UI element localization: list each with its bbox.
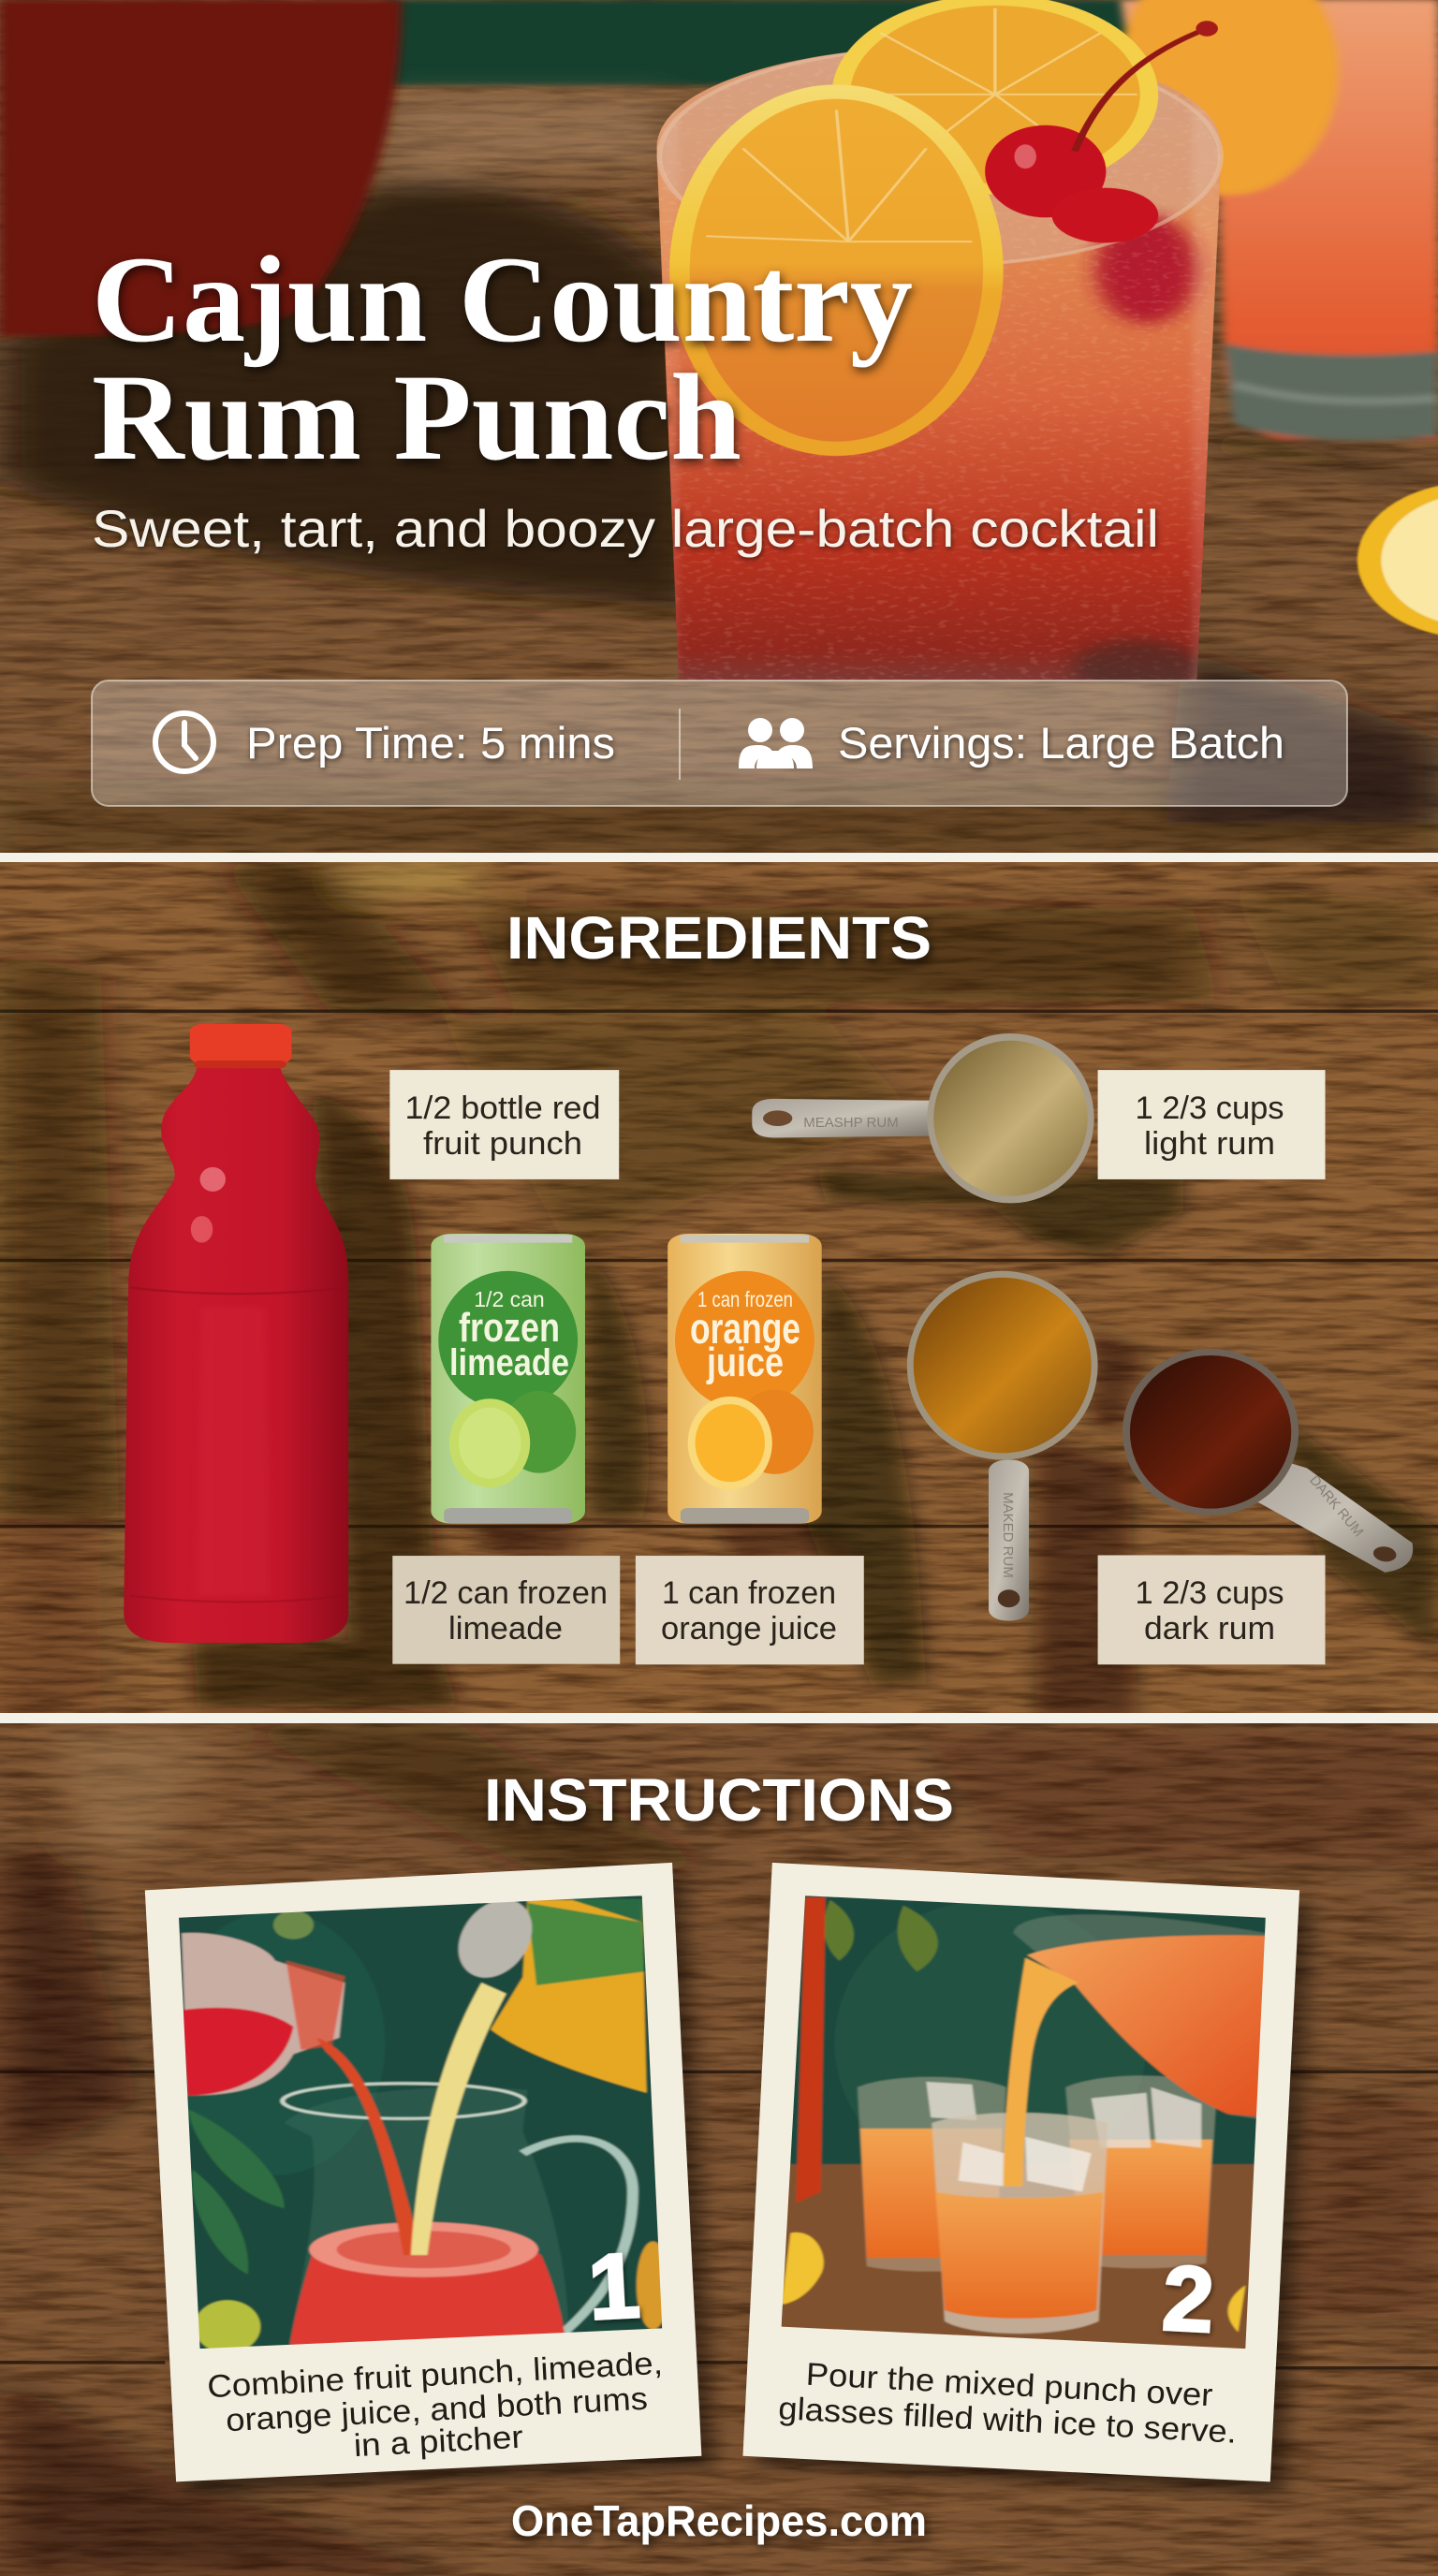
can label text: limeade: limeade [449,1342,569,1383]
red bottle [182,1933,345,2096]
step 1 number and caption [200,2232,667,2471]
label: dark rum [1098,1555,1326,1664]
ingredient captions [404,1090,1284,1647]
ingredient captions: light rum [1144,1126,1275,1162]
title: Rum Punch [92,348,741,486]
ingredient captions: dark rum [1144,1611,1275,1647]
title: Cajun Country [92,230,913,368]
cup handle engravings: DARK RUM [1306,1472,1367,1540]
ingredient captions: 1 2/3 cups [1135,1575,1284,1611]
label: fruit punch [389,1070,619,1179]
can label text: limeade: frozen [459,1305,560,1351]
background foliage [385,0,1137,85]
plank gaps [0,2071,1438,2368]
back lemon slice [831,0,1158,195]
ingredient captions: 1 can frozen [662,1575,836,1611]
can label text: orange juice [690,1287,800,1385]
footer website: OneTapRecipes.com [511,2496,927,2545]
heading: instructions: INSTRUCTIONS [484,1766,954,1834]
pour streams [316,2038,422,2255]
step 1 number and caption: orange juice, and both rums [225,2381,649,2438]
subtitle: Sweet, tart, and boozy large-batch cocktail [92,499,1159,558]
jug and stream [1013,1914,1266,2120]
lemon on table [1357,482,1438,638]
ingredient captions: 1 2/3 cups [1135,1090,1284,1126]
can label text: limeade: 1/2 can [474,1287,545,1311]
ingredient captions: 1/2 bottle red [404,1090,601,1126]
plank gaps [0,1011,1438,1527]
step 2 number and caption: 2 [1160,2247,1216,2351]
heading: ingredients: INGREDIENTS [506,904,932,972]
section: instructions [0,1723,1438,2576]
polaroid shadows [156,1875,1312,2495]
cherries [985,21,1218,242]
ingredient captions: limeade [448,1611,563,1647]
can label text: orange juice: orange [690,1304,800,1353]
lemon wedges [782,2232,824,2305]
label: orange juice [636,1556,864,1664]
light and shadow [0,863,1438,1722]
cup handle engravings: MAKED RUM [1000,1492,1016,1578]
can label text: orange juice: 1 can frozen [697,1287,793,1311]
red pitcher [0,0,402,336]
step 2 photo [780,1889,1275,2357]
orange juice can [668,1234,822,1524]
light and shadow [0,1724,1438,2576]
section: ingredients [0,862,1438,1722]
polaroid 2 frame [742,1863,1299,2481]
section: hero photo [0,0,1438,861]
prep time: Prep Time: 5 mins [246,718,615,768]
red fruit punch bottle [124,1024,348,1643]
label: limeade [392,1556,620,1664]
can label text: limeade [449,1287,569,1383]
ingredient captions: 1/2 can frozen [404,1575,608,1611]
step 2 number and caption: Pour the mixed punch over [805,2357,1213,2413]
orange juice carton and can [491,1900,647,2093]
can label text: orange juice: juice [706,1339,784,1385]
icon: clock [155,713,213,771]
light rum cup [752,1033,1094,1203]
cocktail glass [656,47,1225,695]
limeade can [431,1234,585,1524]
step 2 number and caption [777,2226,1246,2451]
ingredient captions: orange juice [661,1611,837,1647]
cup handle engravings [803,1115,1367,1578]
step 1 number and caption: 1 [586,2233,642,2339]
polaroid 1 frame [145,1863,701,2481]
title [92,230,913,486]
ingredient captions: fruit punch [423,1126,582,1162]
dark rum cup [1123,1349,1413,1573]
pitcher [285,2087,568,2343]
label: light rum [1098,1070,1326,1179]
back glasses [858,2077,1006,2272]
step 1 number and caption: in a pitcher [353,2420,524,2464]
background pitcher [1119,0,1438,440]
info bar [92,681,1347,806]
step 1 photo [165,1889,679,2357]
cup handle engravings: MEASHP RUM [803,1115,899,1131]
step 2 number and caption: glasses filled with ice to serve. [777,2391,1238,2451]
servings: Servings: Large Batch [838,718,1284,768]
front glass [932,2113,1108,2334]
step 1 number and caption: Combine fruit punch, limeade, [206,2346,664,2405]
front lemon slice [669,84,1004,456]
object shadows [193,1090,459,1706]
amber rum cup [907,1271,1098,1620]
icon: people [739,718,813,768]
